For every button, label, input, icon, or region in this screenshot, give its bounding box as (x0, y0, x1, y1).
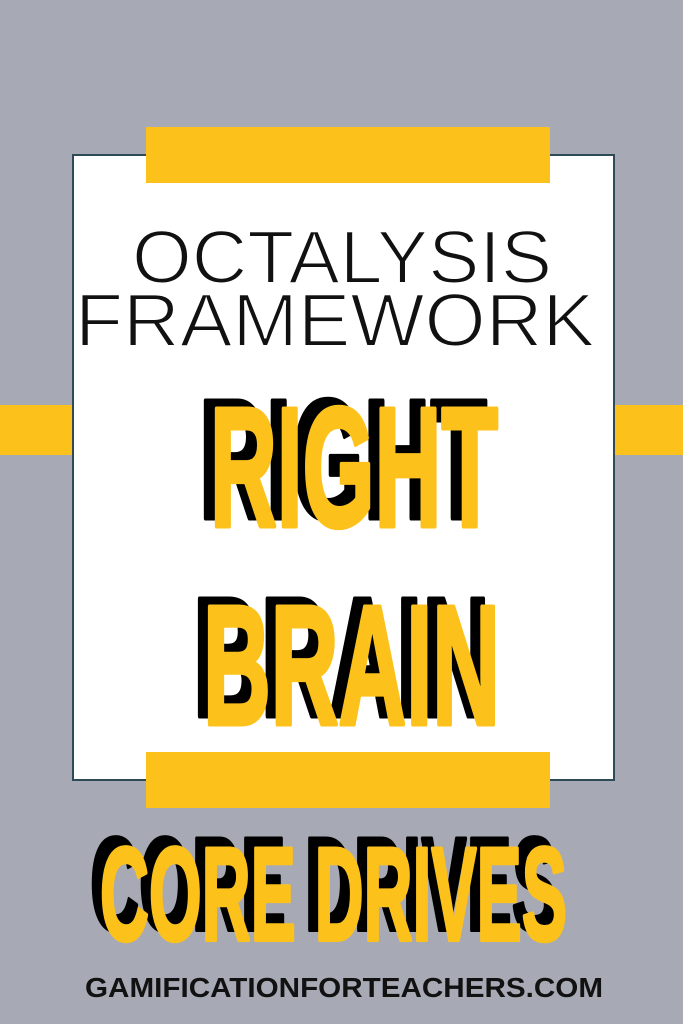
title: right brain (193, 365, 500, 761)
bottom yellow bar (146, 752, 550, 808)
footer url: GAMIFICATIONFORTEACHERS.COM (85, 972, 603, 1003)
heading: octalysis framework (75, 215, 595, 362)
heading: octalysis framework: OCTALYSIS (132, 215, 552, 299)
side bar right (614, 405, 683, 455)
white panel (73, 155, 614, 780)
top yellow bar (146, 127, 550, 183)
side bar left (0, 405, 74, 455)
heading: octalysis framework: FRAMEWORK (75, 278, 595, 362)
